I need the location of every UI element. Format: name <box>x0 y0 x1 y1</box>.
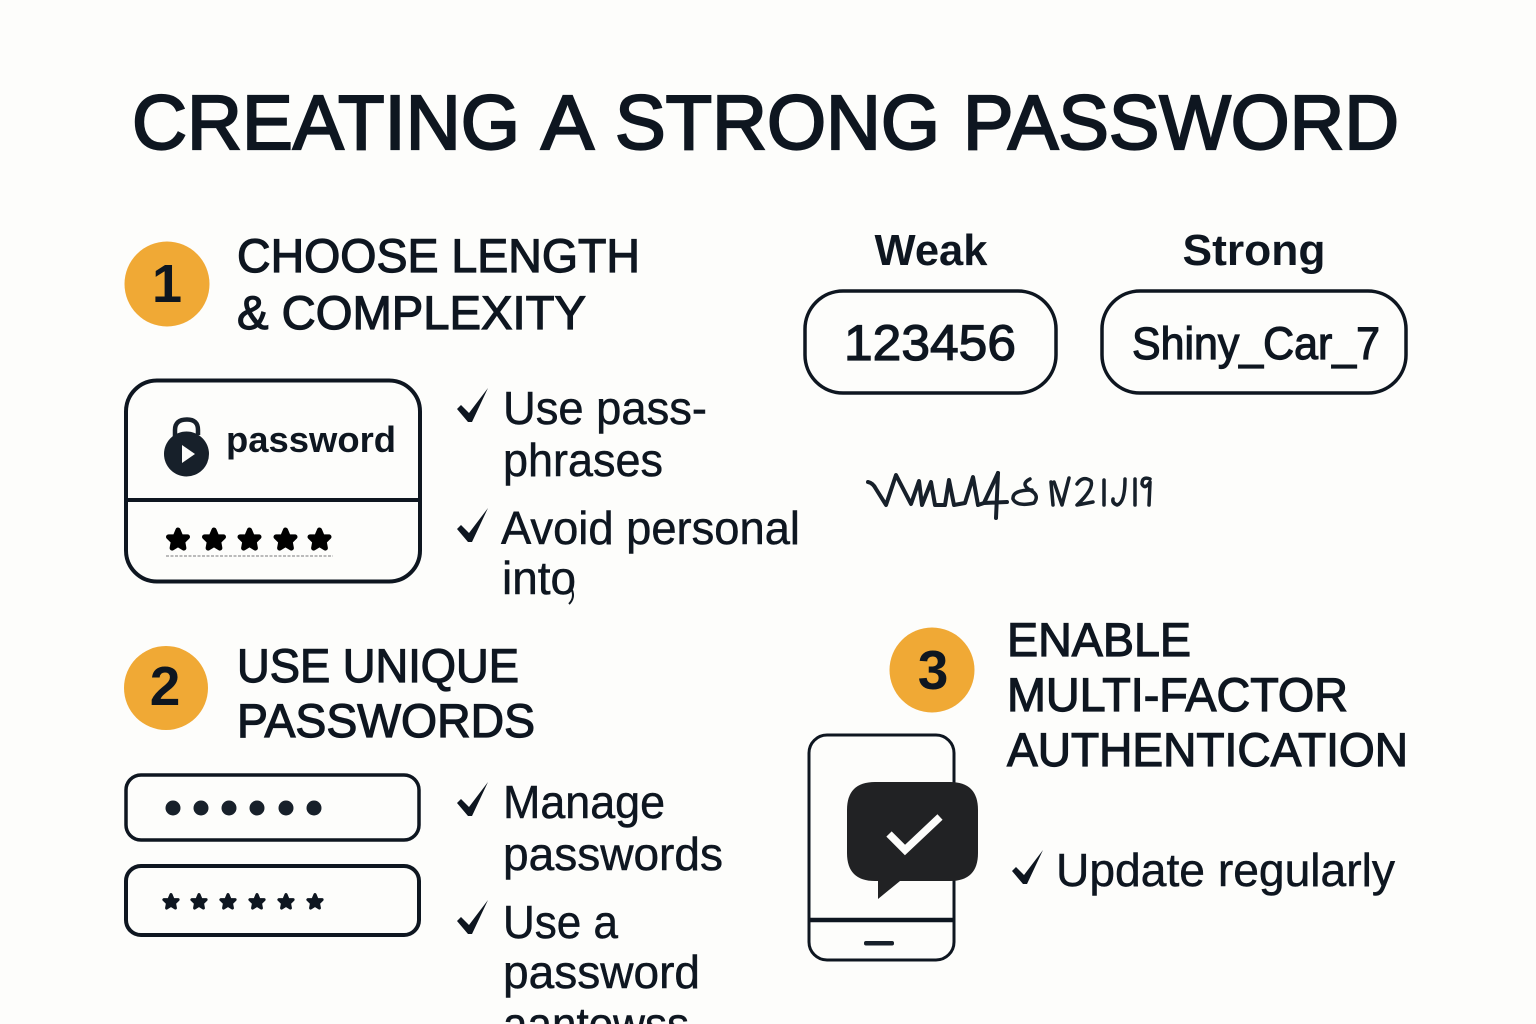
check: use a password manager: password <box>503 946 700 998</box>
strong password box: Shiny_Car_7 <box>1132 318 1380 369</box>
title <box>132 80 1399 166</box>
heading 2: PASSWORDS <box>237 694 535 747</box>
icon: phone with chat confirmation <box>809 735 978 960</box>
check mark in bubble <box>889 817 940 850</box>
icon: open padlock <box>164 420 209 476</box>
strong password box <box>1102 291 1406 393</box>
checklist 2 <box>457 776 723 1024</box>
number badge 1 <box>124 242 210 326</box>
section 2: use unique passwords <box>124 639 723 1024</box>
number badge 3 <box>890 628 974 712</box>
heading 3: ENABLE <box>1007 613 1191 666</box>
chat bubble <box>847 782 978 899</box>
heading 3 <box>1007 613 1408 776</box>
check: use passphrases <box>457 382 707 486</box>
check: avoid personal info: into <box>502 552 576 604</box>
title: STRONG <box>615 80 940 166</box>
weak label: Weak <box>874 226 988 275</box>
weak password box <box>805 291 1056 393</box>
check: avoid personal info <box>457 502 800 604</box>
section 1: choose length and complexity <box>124 229 800 604</box>
check: manage passwords <box>457 776 723 880</box>
scribbled handwriting <box>868 473 1150 518</box>
heading 1: CHOOSE LENGTH <box>237 229 640 282</box>
title: CREATING <box>132 80 520 166</box>
number badge 2 <box>124 646 208 730</box>
title: PASSWORD <box>963 80 1399 166</box>
heading 3: MULTI-FACTOR <box>1007 668 1348 721</box>
heading 1 <box>237 229 640 339</box>
heading 2: USE UNIQUE <box>237 639 519 692</box>
weak password box: 123456 <box>844 315 1016 371</box>
password field with stars <box>126 866 419 935</box>
check: use passphrases: Use pass- <box>503 382 707 434</box>
check: use passphrases: phrases <box>503 434 663 486</box>
section 3: enable multi-factor authentication <box>809 613 1408 960</box>
title: A <box>541 80 595 166</box>
checklist 1 <box>457 382 800 604</box>
check: update regularly: Update regularly <box>1056 844 1395 896</box>
number badge 1: 1 <box>152 254 182 314</box>
password field with dots <box>126 775 419 840</box>
number badge 2: 2 <box>150 655 180 717</box>
masked stars <box>168 530 329 548</box>
check: avoid personal info: Avoid personal <box>501 502 800 554</box>
heading 3: AUTHENTICATION <box>1007 723 1408 776</box>
check: manage passwords: passwords <box>503 828 723 880</box>
password label: password <box>226 419 396 460</box>
strong label: Strong <box>1182 226 1326 275</box>
check: use a password manager <box>457 896 700 1024</box>
check: use a password manager: Use a <box>503 896 618 948</box>
weak versus strong examples <box>805 226 1406 393</box>
heading 1: & COMPLEXITY <box>237 286 586 339</box>
check: manage passwords: Manage <box>503 776 665 828</box>
number badge 3: 3 <box>918 639 948 701</box>
heading 2 <box>237 639 535 747</box>
password card illustration <box>126 380 420 582</box>
